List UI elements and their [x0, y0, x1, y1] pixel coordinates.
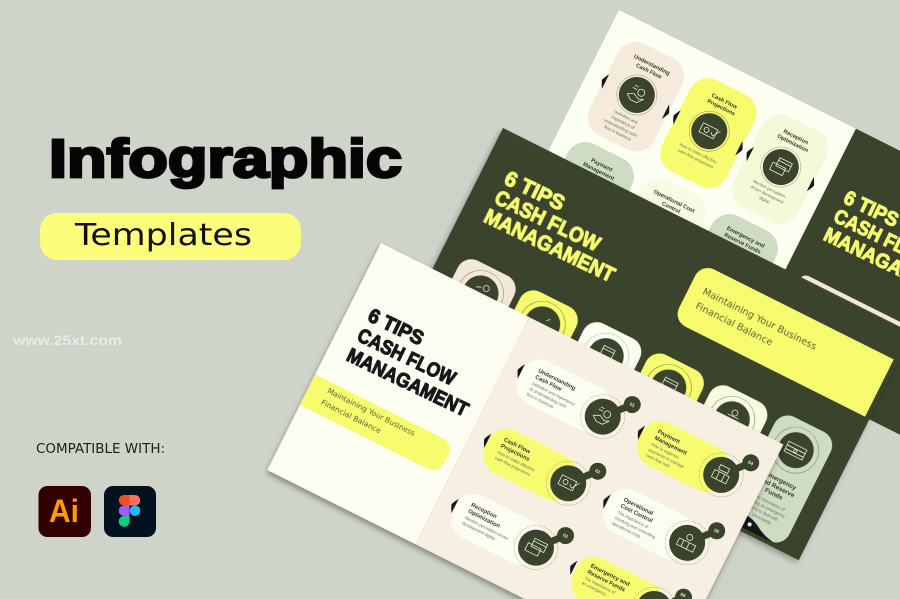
- icon: Adobe Illustrator: Ai: [49, 493, 79, 529]
- card: Understanding Cash Flow: understanding cash: [603, 117, 639, 138]
- heading: 6 TIPS: [501, 167, 568, 215]
- subtitle bar: Maintaining Your Business: [326, 386, 417, 438]
- card: Understanding Cash Flow: Cash Flow: [635, 63, 663, 81]
- tip 04: Payment Management: Management: [653, 435, 688, 457]
- side panel heading: [820, 186, 900, 303]
- tip 02: Cash Flow Projections: How to make effective: [497, 450, 536, 473]
- tip 05: Operational Cost Control: checking and controlling: [614, 515, 657, 540]
- card: Operational Cost Control: Operational Cost: [652, 189, 695, 215]
- card: Emergency and Reserve Funds: [675, 207, 785, 331]
- subtitle box: Maintaining Your Business: [701, 286, 818, 353]
- card: Cash Flow Projections: [653, 71, 763, 195]
- subtitle pill: Templates: [74, 218, 252, 253]
- tip 01: Understanding Cash Flow: 01: [629, 401, 636, 408]
- heading: CASH FLOW: [354, 325, 459, 390]
- card: Reception Optimization: Optimization: [776, 134, 809, 154]
- tip 03: Reception Optimization: Reception: [470, 502, 498, 521]
- card notches: [598, 73, 817, 193]
- heading: CASH FLOW: [491, 186, 604, 256]
- card: Reception Optimization: Mention perception-: [752, 178, 788, 200]
- card: Reception Optimization: driven development: [750, 184, 785, 205]
- tip 04: Payment Management: payments to manage: [648, 447, 686, 469]
- heading: MANAGAMENT: [343, 345, 472, 421]
- slide background panels: [267, 243, 783, 599]
- card: Emergency and Reserve Funds: and Reserve: [758, 476, 796, 500]
- card: Emergency and Reserve Funds: fund to deal with: [749, 504, 780, 523]
- subtitle bar: [300, 374, 454, 474]
- tip 02: Cash Flow Projections: Projections: [499, 443, 530, 463]
- subtitle bar: Financial Balance: [320, 398, 383, 435]
- tip 03: Reception Optimization: 03: [562, 532, 569, 539]
- subtitle pill: [40, 213, 301, 260]
- tip 03: Reception Optimization: [440, 476, 577, 582]
- compatible with label: COMPATIBLE WITH:: [36, 442, 165, 457]
- card: Understanding Cash Flow: importance of: [611, 114, 636, 131]
- card row: [411, 254, 772, 516]
- tip 02: Cash Flow Projections: Cash Flow: [503, 437, 532, 456]
- card: Payment Management: Payment: [590, 158, 613, 174]
- card: Payment Management: Management: [582, 162, 615, 182]
- tip 06: Emergency and Reserve Funds: an emergency: [581, 580, 608, 597]
- tip 06: Emergency and Reserve Funds: 06: [680, 592, 687, 599]
- tip 04: Payment Management: [626, 404, 762, 510]
- tip 05: Operational Cost Control: operational costs: [611, 520, 642, 539]
- tip 03: Reception Optimization: development digital: [461, 520, 496, 541]
- tip 01: Understanding Cash Flow: flow in business: [526, 392, 554, 409]
- tip 06: Emergency and Reserve Funds: Reserve Funds: [586, 570, 626, 594]
- card: Emergency and Reserve Funds: The importance of: [753, 493, 786, 513]
- slide: middle (dark): [389, 128, 900, 560]
- slide: front (cream with beige panel): [267, 243, 783, 599]
- heading: [480, 166, 637, 287]
- heading: MANAGAMENT: [480, 205, 618, 287]
- icon: Adobe Illustrator: [38, 486, 91, 537]
- tip 01: Understanding Cash Flow: [506, 344, 644, 450]
- tip 05: Operational Cost Control: 05: [713, 528, 720, 535]
- tip 05: Operational Cost Control: Cost Control: [619, 503, 654, 525]
- heading: [342, 302, 492, 423]
- card: Cash Flow Projections: Projections: [706, 98, 736, 118]
- icon: Figma: [104, 486, 156, 537]
- tip 04: Payment Management: How to organize: [651, 442, 680, 460]
- card: Cash Flow Projections: How to make effective: [679, 142, 718, 165]
- slide: back (cards on cream with dark side panel): [505, 10, 900, 453]
- card: Understanding Cash Flow: flow in business: [603, 124, 632, 142]
- tip 04: Payment Management: cash flow well: [645, 452, 671, 469]
- card: Reception Optimization: Reception: [782, 129, 810, 147]
- card: Emergency and Reserve Funds: [726, 410, 837, 548]
- card: Emergency and Reserve Funds: Reserve Funds: [723, 232, 762, 256]
- tip 01: Understanding Cash Flow: of understanding cash: [528, 386, 568, 409]
- card: Reception Optimization: [725, 107, 835, 231]
- watermark: www.25xt.com: [12, 332, 122, 348]
- tip 03: Reception Optimization: Optimization: [467, 509, 501, 530]
- title: Infographic: [49, 129, 402, 189]
- card: Understanding Cash Flow: [581, 35, 691, 158]
- tip 05: Operational Cost Control: The importance of: [617, 510, 650, 530]
- subtitle box: [673, 263, 894, 417]
- card: Payment Management: [531, 135, 641, 259]
- tip 04: Payment Management: 04: [747, 460, 754, 467]
- heading: 6 TIPS: [364, 305, 427, 350]
- card: Cash Flow Projections: Cash Flow: [710, 93, 738, 111]
- tip 05: Operational Cost Control: Operational: [622, 497, 654, 517]
- tip 05: Operational Cost Control: [592, 472, 728, 577]
- tip 02: Cash Flow Projections: cash flow projections: [494, 455, 531, 477]
- tip 04: Payment Management: Payment: [656, 429, 681, 445]
- tip 06: Emergency and Reserve Funds: Emergency and: [589, 563, 631, 588]
- card: Operational Cost Control: [603, 171, 713, 295]
- tip 06: Emergency and Reserve Funds: The importance of: [584, 575, 617, 595]
- tip 01: Understanding Cash Flow: Definition and importance: [531, 381, 576, 407]
- card: Reception Optimization: digital: [758, 195, 771, 204]
- card: Emergency and Reserve Funds: uncertainty: [751, 512, 773, 526]
- tip 03: Reception Optimization: Mention perception-driven: [464, 515, 510, 541]
- card: Understanding Cash Flow: Definition and: [613, 109, 639, 125]
- tip 01: Understanding Cash Flow: Understanding: [537, 368, 577, 392]
- subtitle box: Financial Balance: [693, 301, 774, 349]
- card: Emergency and Reserve Funds: Emergency: [763, 470, 798, 492]
- tip 02: Cash Flow Projections: [473, 412, 609, 518]
- card: Emergency and Reserve Funds: Emergency and: [725, 226, 766, 250]
- card: Operational Cost Control: Control: [661, 201, 681, 215]
- tip 02: Cash Flow Projections: 02: [594, 468, 601, 475]
- card: Emergency and Reserve Funds: having an emergency: [748, 497, 787, 519]
- side panel bar: [789, 273, 900, 389]
- tip 01: Understanding Cash Flow: Cash Flow: [534, 375, 563, 393]
- tip 06: Emergency and Reserve Funds: [567, 557, 692, 599]
- card: Understanding Cash Flow: Understanding: [633, 54, 671, 77]
- card: Emergency and Reserve Funds: Funds: [763, 487, 784, 502]
- card: Cash Flow Projections: cash flow projections: [677, 148, 714, 169]
